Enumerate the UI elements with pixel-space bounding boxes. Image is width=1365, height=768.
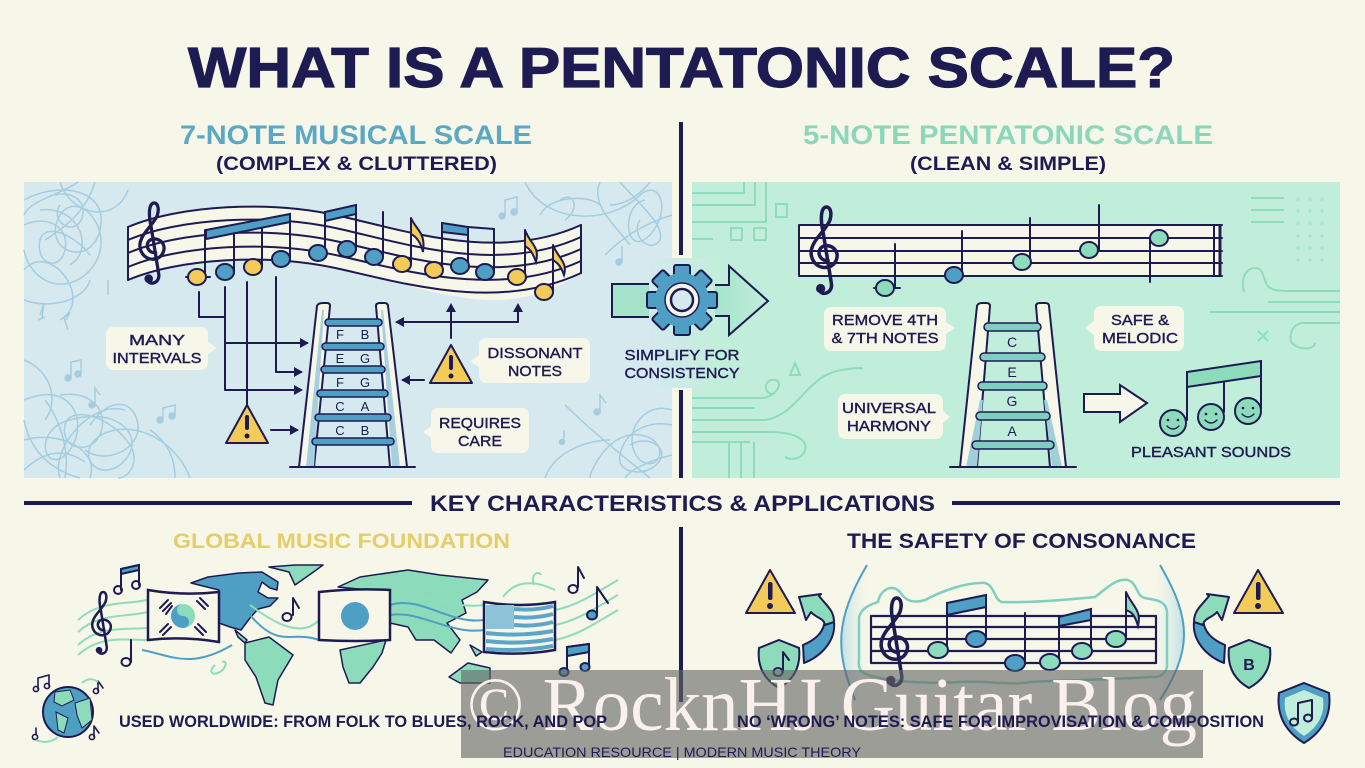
callout: many intervals: INTERVALS xyxy=(112,350,202,367)
ladder: seven notes: E xyxy=(336,351,345,366)
icon: smiling notes xyxy=(1160,361,1261,436)
flag: Japan xyxy=(319,589,390,641)
section heading: key characteristics: KEY CHARACTERISTICS & APPLICATIONS xyxy=(430,491,935,516)
icon: warning right xyxy=(430,345,472,383)
ladder: seven notes: C xyxy=(335,399,345,414)
icon: warning left xyxy=(226,405,268,443)
callout: remove notes: & 7TH NOTES xyxy=(832,330,938,347)
icon: treble clef xyxy=(92,592,111,654)
ladder: seven notes: F xyxy=(336,327,344,342)
connector arrows xyxy=(199,277,523,435)
outer bubble xyxy=(841,565,1184,700)
straight staff with notes xyxy=(799,205,1222,296)
arrow: deflect left xyxy=(799,594,834,663)
ladder: seven notes: F xyxy=(336,375,344,390)
divider: center top xyxy=(650,122,720,478)
ladder: seven notes: B xyxy=(361,327,369,342)
arrow: to pleasant sounds xyxy=(1084,385,1147,422)
callout: universal harmony: HARMONY xyxy=(847,418,931,435)
heading: global music foundation: GLOBAL MUSIC FOUNDATION xyxy=(173,530,510,553)
ladder: seven notes: G xyxy=(360,351,370,366)
callout: many intervals: MANY xyxy=(129,332,185,349)
heading: 7-note scale xyxy=(180,120,532,175)
ladder: seven notes: A xyxy=(361,399,370,414)
callout: requires care: REQUIRES xyxy=(439,415,521,432)
section heading: key characteristics xyxy=(24,491,1340,516)
label: simplify for consistency xyxy=(624,347,740,382)
callout: safe and melodic xyxy=(1085,306,1184,351)
panel: 7-note scale xyxy=(24,182,672,478)
label: simplify for consistency: CONSISTENCY xyxy=(624,365,740,382)
callout: dissonant notes: DISSONANT xyxy=(488,345,582,362)
simplify arrow and gear xyxy=(612,265,768,382)
callout: requires care xyxy=(423,408,529,453)
chart: world map with flags xyxy=(78,565,618,705)
icons: scattered notes xyxy=(114,565,608,676)
caption: used worldwide: USED WORLDWIDE: FROM FOLK TO BLUES, ROCK, AND POP xyxy=(119,713,607,731)
callout: safe and melodic: MELODIC xyxy=(1102,330,1178,347)
ladder: five notes xyxy=(950,303,1076,467)
callout: dissonant notes xyxy=(470,338,590,383)
ladder: seven notes: G xyxy=(360,375,370,390)
ladder: five notes: C xyxy=(1007,334,1017,350)
icon: warning triangle right xyxy=(1234,570,1283,613)
title: WHAT IS A PENTATONIC SCALE? xyxy=(188,36,1175,100)
icon: shield with notes xyxy=(1279,683,1329,743)
ladder: seven notes: B xyxy=(361,423,369,438)
callout: universal harmony xyxy=(838,394,950,439)
flag: Korea xyxy=(148,590,219,642)
icon: shield with B xyxy=(1229,640,1270,688)
icon: small globe xyxy=(32,675,103,742)
icon: warning triangle left xyxy=(746,570,795,613)
map continents xyxy=(191,565,490,705)
heading: 5-note scale: (CLEAN & SIMPLE) xyxy=(910,153,1106,175)
chart: consonance staff xyxy=(841,565,1184,700)
ladder: five notes: A xyxy=(1007,423,1017,439)
caption: no wrong notes: NO ‘WRONG’ NOTES: SAFE FOR IMPROVISATION & COMPOSITION xyxy=(737,713,1264,731)
ladder: seven notes: C xyxy=(335,423,345,438)
heading: 7-note scale: (COMPLEX & CLUTTERED) xyxy=(216,153,497,175)
ladder: five notes: G xyxy=(1007,393,1017,409)
callout: requires care: CARE xyxy=(458,433,502,450)
callout: remove notes xyxy=(824,307,955,351)
background notes xyxy=(38,197,622,444)
heading: 5-note scale xyxy=(803,120,1213,175)
notes xyxy=(928,592,1139,671)
icon: treble clef xyxy=(140,203,164,283)
label: simplify for consistency: SIMPLIFY FOR xyxy=(624,347,740,364)
watermark: © RocknHJ Guitar Blog xyxy=(467,663,1197,747)
heading: safety of consonance: THE SAFETY OF CONSONANCE xyxy=(847,530,1196,553)
icon: treble clef xyxy=(811,207,837,293)
arrow: deflect right xyxy=(1194,594,1229,663)
callout: remove notes: REMOVE 4TH xyxy=(832,312,938,329)
music waves xyxy=(78,573,618,674)
ladder: five notes: E xyxy=(1007,364,1017,380)
callout: safe and melodic: SAFE & xyxy=(1111,312,1169,329)
callout: universal harmony: UNIVERSAL xyxy=(842,400,936,417)
ladder: seven notes xyxy=(290,303,415,467)
callout: many intervals xyxy=(106,327,217,370)
icon: treble clef xyxy=(881,598,907,685)
heading: 7-note scale: 7-NOTE MUSICAL SCALE xyxy=(180,120,532,150)
heading: 5-note scale: 5-NOTE PENTATONIC SCALE xyxy=(803,120,1213,150)
divider: center bottom xyxy=(679,527,683,702)
icon: gear xyxy=(647,265,717,335)
icon: shield with note xyxy=(759,640,799,688)
callout: dissonant notes: NOTES xyxy=(508,363,562,380)
footer: EDUCATION RESOURCE | MODERN MUSIC THEORY xyxy=(503,744,862,760)
icon: shield with B: B xyxy=(1243,657,1255,674)
label: pleasant sounds: PLEASANT SOUNDS xyxy=(1131,444,1291,461)
panel: 5-note scale xyxy=(692,182,1340,478)
staff lines xyxy=(871,616,1156,663)
wavy staff with notes xyxy=(128,203,581,300)
flag: USA xyxy=(484,602,555,654)
